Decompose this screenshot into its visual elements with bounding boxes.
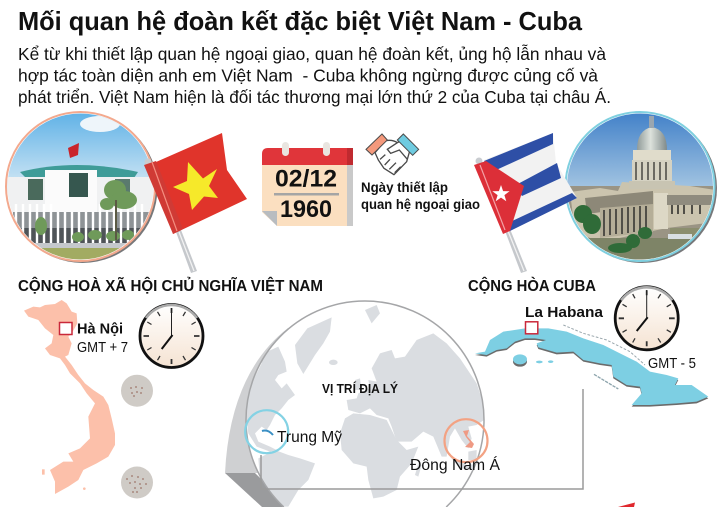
- clock: Havana 7:00: [615, 287, 678, 350]
- label: Southeast Asia: Đông Nam Á: [410, 455, 500, 474]
- icon: handshake: [366, 134, 419, 175]
- calendar date: [262, 142, 353, 226]
- heading: Vietnam: CỘNG HOÀ XÃ HỘI CHỦ NGHĨA VIỆT NAM: [18, 277, 323, 295]
- intro text block: Kể từ khi thiết lập quan hệ ngoại giao, quan hệ đoàn kết, ủng hộ lẫn nhau và: [18, 43, 606, 64]
- marker: Hanoi: [60, 322, 72, 334]
- globe map: [246, 301, 484, 507]
- globe shadow: [225, 328, 300, 507]
- intro text block: [18, 43, 611, 107]
- label: Hanoi GMT +7: [77, 320, 128, 356]
- caption: establishment date: quan hệ ngoại giao: [361, 196, 480, 212]
- label: Hanoi GMT +7: GMT + 7: [77, 339, 128, 356]
- marker: Cuba on globe: [262, 430, 273, 435]
- caption: establishment date: Ngày thiết lập: [361, 179, 448, 195]
- label: Hanoi GMT +7: Hà Nội: [77, 320, 123, 338]
- flag: Cuba on pin: [474, 133, 577, 273]
- red arrow tip: [618, 502, 635, 507]
- marker: Havana: [526, 322, 538, 334]
- ring: Central America: [245, 410, 288, 453]
- map: Cuba: [475, 325, 708, 407]
- year text: 1960: [280, 196, 332, 223]
- dots: Hoang Sa islands: [121, 375, 153, 407]
- date text: 02/12: [275, 166, 337, 192]
- map: Vietnam: [24, 300, 115, 494]
- caption: establishment date: [361, 179, 480, 212]
- label: geographic location: VỊ TRÍ ĐỊA LÝ: [322, 381, 399, 396]
- clock: Hanoi 7:00: [140, 304, 203, 368]
- dots: Truong Sa islands: [121, 466, 153, 498]
- intro text block: hợp tác toàn diện anh em Việt Nam - Cuba không ngừng được củng cố và: [18, 66, 598, 86]
- marker: Vietnam on globe: [463, 430, 474, 448]
- frame line: [261, 389, 583, 489]
- photo: Vietnam National Assembly building: [5, 110, 158, 264]
- label: Central America: Trung Mỹ: [277, 429, 342, 446]
- ring: Southeast Asia: [444, 419, 488, 462]
- photo: Cuban Capitol building: [565, 110, 720, 266]
- label: GMT -5: GMT - 5: [648, 355, 696, 372]
- heading: Cuba: CỘNG HÒA CUBA: [468, 277, 596, 295]
- label: Havana: La Habana: [525, 304, 604, 321]
- intro text block: phát triển. Việt Nam hiện là đối tác thương mại lớn thứ 2 của Cuba tại châu Á.: [18, 87, 611, 107]
- star: [492, 185, 510, 201]
- title: Mối quan hệ đoàn kết đặc biệt Việt Nam - Cuba: [18, 6, 583, 36]
- flag: Vietnam on pin: [144, 133, 247, 273]
- star: [173, 162, 218, 210]
